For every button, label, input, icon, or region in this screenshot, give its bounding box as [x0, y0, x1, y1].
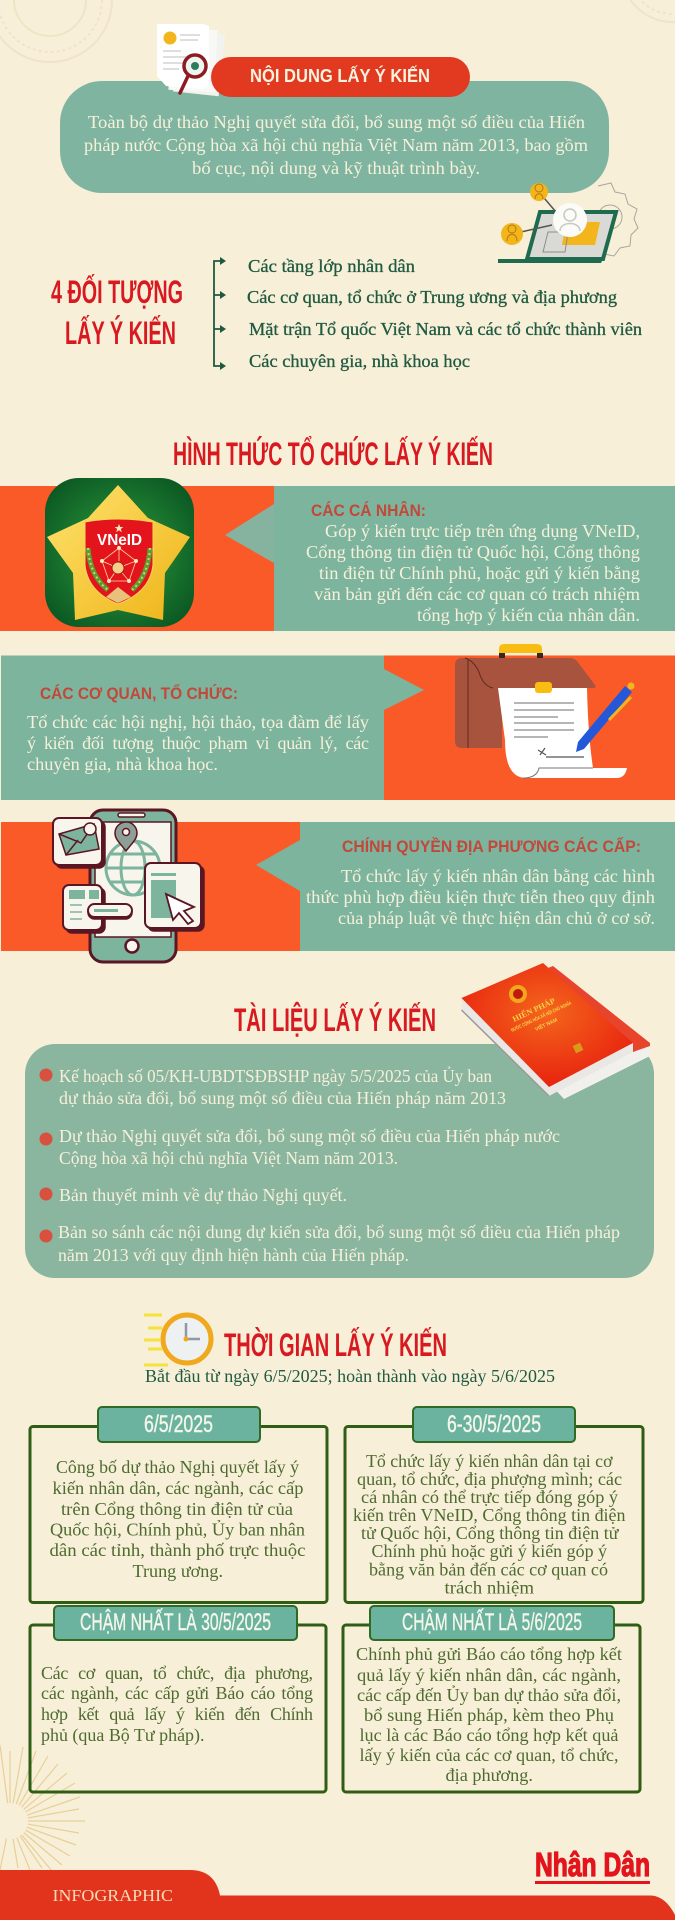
card text: trách nhiệm: [444, 1578, 534, 1598]
card text: Tổ chức lấy ý kiến nhân dân tại cơ: [366, 1451, 613, 1471]
list: target groups: Các chuyên gia, nhà khoa học: [249, 351, 470, 371]
card text: địa phương.: [446, 1765, 533, 1785]
card text: các cấp đến Ủy ban dự thảo sửa đổi,: [357, 1684, 621, 1705]
text: individuals: Góp ý kiến trực tiếp trên ứng dụng VNeID,: [325, 521, 640, 541]
tag: CHẬM NHẤT LÀ 5/6/2025: [402, 1608, 582, 1636]
panel: documents: [25, 1044, 654, 1278]
tag: 6/5/2025: [144, 1411, 213, 1438]
card text: kiến trên VNeID, Cổng thông tin điện: [353, 1505, 626, 1525]
card text: tử Quốc hội, Cổng thông tin điện tử: [361, 1523, 620, 1543]
text: local authorities: Tổ chức lấy ý kiến nhân dân bằng các hình: [341, 866, 655, 886]
card text: [356, 1644, 622, 1785]
text: content description: [84, 112, 588, 178]
card: no later than 30/5/2025: [30, 1606, 326, 1792]
tag: [413, 1407, 575, 1442]
icon: document with magnifier: [157, 24, 225, 96]
card text: Trung ương.: [132, 1561, 223, 1581]
tag: [98, 1407, 260, 1442]
list: target groups: Mặt trận Tổ quốc Việt Nam và các tổ chức thành viên: [249, 319, 642, 339]
card text: cá nhân có thể trực tiếp đóng góp ý: [361, 1487, 618, 1507]
subtitle: time span: Bắt đầu từ ngày 6/5/2025; hoàn thành vào ngày 5/6/2025: [145, 1366, 555, 1386]
list: documents: Dự thảo Nghị quyết sửa đổi, bổ sung một số điều của Hiến pháp nước: [59, 1126, 560, 1146]
card text: dân các tỉnh, thành phố trực thuộc: [50, 1540, 306, 1560]
subheading: individuals: CÁC CÁ NHÂN:: [311, 501, 426, 520]
icon: constitution book: [462, 963, 650, 1099]
heading: 4 target groups: LẤY Ý KIẾN: [65, 315, 176, 351]
icon: constitution book: VIỆT NAM: [533, 1015, 558, 1033]
subheading: local authorities: CHÍNH QUYỀN ĐỊA PHƯƠNG CÁC CẤP:: [342, 837, 641, 856]
text: content description: bố cục, nội dung và kỹ thuật trình bày.: [192, 158, 480, 178]
card text: quan, tổ chức, địa phượng mình; các: [357, 1469, 622, 1489]
list: documents: [58, 1065, 620, 1265]
panel: individuals: [0, 478, 675, 631]
subheading: agencies: CÁC CƠ QUAN, TỔ CHỨC:: [40, 684, 238, 703]
card text: lấy ý kiến của các cơ quan, tổ chức,: [360, 1745, 618, 1765]
icon: VNeID: VNeID: [97, 532, 142, 549]
card text: bằng văn bản đến các cơ quan có: [369, 1560, 608, 1580]
list: documents: dự thảo sửa đổi, bổ sung một số điều của Hiến pháp năm 2013: [59, 1088, 506, 1108]
card text: các ngành, các cấp gửi Báo cáo tổng: [41, 1683, 313, 1703]
card text: Quốc hội, Chính phủ, Ủy ban nhân: [50, 1518, 305, 1540]
card text: Công bố dự thảo Nghị quyết lấy ý: [56, 1457, 299, 1477]
card: no later than 5/6/2025: [343, 1606, 640, 1792]
panel: agencies and organizations: [1, 644, 675, 800]
tag: [54, 1606, 297, 1640]
bracket with arrows: [214, 257, 226, 370]
title pill: content: NỘI DUNG LẤY Ý KIẾN: [250, 65, 430, 86]
text: agencies: Tổ chức các hội nghị, hội thảo, tọa đàm để lấy: [27, 712, 369, 732]
list: target groups: [247, 256, 642, 371]
panel: content description: [60, 81, 609, 193]
tag: CHẬM NHẤT LÀ 30/5/2025: [80, 1608, 271, 1636]
card text: hợp kết quả lấy ý kiến đến Chính: [41, 1704, 313, 1724]
icon: constitution book: NƯỚC CỘNG HÒA XÃ HỘI CHỦ NGHĨA: [509, 999, 573, 1034]
text: individuals: [306, 521, 640, 625]
heading: 4 target groups: 4 ĐỐI TƯỢNG: [51, 274, 183, 310]
icon: briefcase and contract: [455, 644, 634, 778]
text: local authorities: của pháp luật về thực hiện dân chủ ở cơ sở.: [338, 908, 655, 928]
text: local authorities: [306, 866, 655, 928]
footer bar: [0, 1870, 675, 1920]
card text: lục là các Báo cáo tổng hợp kết quả: [360, 1725, 619, 1745]
text: content description: Toàn bộ dự thảo Nghị quyết sửa đổi, bổ sung một số điều của Hiến: [88, 112, 585, 132]
text: agencies: [27, 712, 369, 774]
list: documents: Bản so sánh các nội dung dự kiến sửa đổi, bổ sung một số điều của Hiến pháp: [58, 1222, 620, 1242]
list: target groups: Các tầng lớp nhân dân: [248, 256, 415, 276]
tag: 6-30/5/2025: [447, 1411, 541, 1438]
list: target groups: Các cơ quan, tổ chức ở Trung ương và địa phương: [247, 287, 617, 307]
text: content description: pháp nước Cộng hòa xã hội chủ nghĩa Việt Nam năm 2013, bao gồm: [84, 135, 588, 155]
title pill: content: [211, 57, 470, 97]
card text: Chính phủ hoặc gửi ý kiến góp ý: [372, 1541, 607, 1561]
tag: [370, 1606, 614, 1640]
card text: bổ sung Hiến pháp, kèm theo Phụ: [364, 1705, 614, 1725]
text: agencies: chuyên gia, nhà khoa học.: [27, 754, 218, 774]
card text: phủ (qua Bộ Tư pháp).: [41, 1725, 204, 1746]
heading: time: THỜI GIAN LẤY Ý KIẾN: [224, 1327, 447, 1363]
card text: [353, 1451, 626, 1598]
list: documents: Kế hoạch số 05/KH-UBDTSĐBSHP ngày 5/5/2025 của Ủy ban: [59, 1065, 492, 1086]
icon: constitution book: HIẾN PHÁP: [511, 995, 557, 1024]
text: local authorities: thức phù hợp điều kiện thực tiễn theo quy định: [306, 887, 655, 907]
text: agencies: ý kiến đối tượng thuộc phạm vi quản lý, các: [27, 733, 369, 753]
panel: local authorities: [1, 810, 675, 962]
icon: VNeID: [45, 478, 194, 627]
card text: trên Cổng thông tin điện tử của: [61, 1499, 293, 1519]
card text: kiến nhân dân, các ngành, các cấp: [52, 1478, 304, 1498]
list: documents: Bản thuyết minh về dự thảo Nghị quyết.: [59, 1185, 347, 1205]
heading: 4 target groups: [51, 274, 183, 351]
icon: laptop with users: [498, 183, 638, 263]
text: individuals: Cổng thông tin điện tử Quốc hội, Cổng thông: [306, 542, 640, 562]
text: individuals: tổng hợp ý kiến của nhân dân.: [417, 605, 640, 625]
icon: phone with web cards: [53, 810, 204, 962]
footer label: INFOGRAPHIC: [52, 1886, 173, 1905]
text: individuals: tin điện tử Chính phủ, hoặc gửi ý kiến bằng: [319, 563, 640, 583]
list: documents: Cộng hòa xã hội chủ nghĩa Việt Nam năm 2013.: [59, 1148, 398, 1168]
card text: [41, 1663, 313, 1746]
card text: [50, 1457, 306, 1581]
text: individuals: văn bản gửi đến các cơ quan có trách nhiệm: [314, 584, 640, 604]
heading: documents: TÀI LIỆU LẤY Ý KIẾN: [234, 1002, 436, 1038]
card text: quả lấy ý kiến nhân dân, các ngành,: [357, 1665, 621, 1685]
bullets: [40, 1068, 52, 1242]
icon: clock: [144, 1315, 211, 1365]
card text: Các cơ quan, tổ chức, địa phương,: [41, 1663, 313, 1683]
card: 6-30/5/2025: [345, 1407, 643, 1602]
card: 6/5/2025: [30, 1407, 327, 1602]
list: documents: năm 2013 với quy định hiện hành của Hiến pháp.: [58, 1245, 409, 1265]
card text: Chính phủ gửi Báo cáo tổng hợp kết: [356, 1644, 622, 1664]
